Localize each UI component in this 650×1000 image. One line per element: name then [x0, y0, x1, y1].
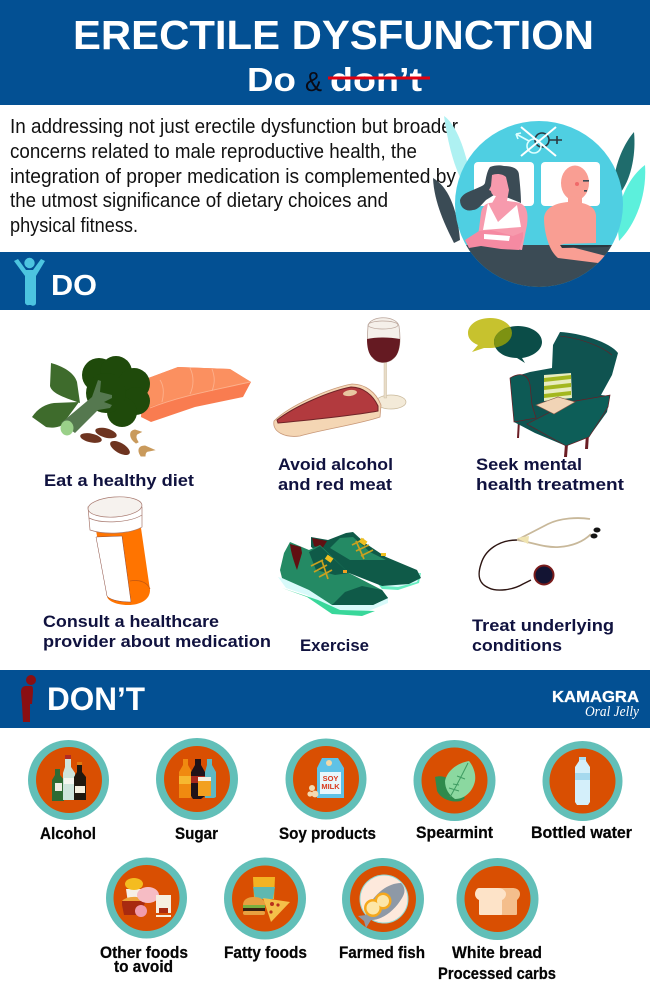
label: provider about medication	[43, 633, 271, 651]
icon: bottles	[52, 755, 86, 801]
illustration: couple in bed	[433, 116, 645, 295]
intro text: In addressing not just erectile dysfunction but broader	[10, 115, 458, 138]
icon: do person	[14, 258, 45, 306]
front shoe	[278, 542, 388, 616]
don't item: alcohol	[28, 740, 109, 843]
salmon	[141, 367, 251, 422]
pill bottle	[87, 495, 150, 605]
label: health treatment	[476, 476, 625, 494]
don't item: soy products	[279, 738, 376, 843]
title: ERECTILE DYSFUNCTION	[73, 12, 594, 58]
woman	[460, 165, 528, 250]
wine glass	[367, 318, 406, 409]
icon: don't person	[21, 675, 36, 722]
stethoscope	[479, 518, 600, 590]
logo: Oral Jelly	[585, 704, 639, 720]
icon: mint leaves	[435, 761, 475, 802]
don't item: farmed fish	[339, 858, 425, 962]
don't item: white bread	[438, 858, 556, 983]
back shoe	[311, 532, 421, 590]
item: exercise	[278, 532, 421, 655]
don't item: spearmint	[414, 740, 496, 842]
do section bar	[0, 252, 650, 310]
icon: mixed foods	[122, 878, 171, 917]
label: Eat a healthy diet	[44, 472, 195, 490]
intro text: physical fitness.	[10, 214, 138, 237]
icon: soy milk carton	[307, 758, 344, 798]
subtitle: do and don't	[247, 61, 430, 98]
man	[544, 166, 612, 263]
item: avoid alcohol and red meat	[274, 318, 406, 494]
label: Other foods	[100, 943, 188, 962]
leaves and broccoli	[32, 356, 150, 436]
intro text: the utmost significance of dietary choices and	[10, 189, 388, 212]
don't item: other foods	[100, 858, 188, 976]
label: Exercise	[300, 637, 369, 655]
item: consult about medication	[43, 495, 271, 651]
label: Bottled water	[531, 823, 632, 842]
nuts	[79, 426, 154, 458]
subtitle: do and don't: &	[305, 66, 322, 97]
label	[43, 613, 271, 651]
sneakers	[278, 532, 421, 616]
intro text: integration of proper medication is complemented by	[10, 165, 457, 188]
item: treat underlying conditions	[472, 518, 614, 655]
icon: soy milk carton: MILK	[321, 782, 340, 791]
logo: KAMAGRA	[552, 689, 639, 706]
icon: soda bottles	[179, 759, 216, 799]
logo	[552, 689, 639, 720]
don't section bar	[0, 670, 650, 728]
icon: bread loaf	[475, 888, 520, 915]
label: Soy products	[279, 824, 376, 843]
intro text	[10, 115, 458, 237]
do heading: DO	[51, 270, 97, 302]
item: healthy diet	[32, 356, 251, 490]
label: Fatty foods	[224, 943, 307, 962]
don't item: bottled water	[531, 741, 632, 842]
label	[278, 456, 393, 494]
label: White bread	[452, 943, 542, 962]
label: Spearmint	[416, 823, 493, 842]
label: and red meat	[278, 476, 393, 494]
label: Avoid alcohol	[278, 456, 393, 474]
label	[438, 943, 556, 983]
crossed gender symbols	[516, 127, 562, 156]
label: Processed carbs	[438, 964, 556, 983]
label: Seek mental	[476, 456, 582, 474]
item: seek mental health treatment	[468, 318, 625, 494]
speech bubbles	[468, 318, 542, 363]
steak	[274, 384, 381, 436]
label: Treat underlying	[472, 617, 614, 635]
don't heading: DON’T	[47, 681, 145, 717]
icon: burger, fries and pizza	[243, 877, 290, 922]
icon: soy milk carton: SOY	[323, 774, 338, 783]
label: conditions	[472, 637, 562, 655]
subtitle: do and don't: don’t	[330, 61, 422, 98]
armchair	[510, 332, 618, 457]
label: Sugar	[175, 824, 218, 843]
don't item: fatty foods	[224, 858, 307, 962]
intro text: concerns related to male reproductive health, the	[10, 140, 417, 163]
leaves	[433, 116, 645, 243]
label: to avoid	[114, 957, 173, 976]
label: Alcohol	[40, 824, 96, 843]
laces	[311, 539, 373, 579]
don't item: sugar	[156, 738, 238, 843]
label	[100, 943, 188, 976]
icon: water bottle	[575, 757, 590, 805]
label	[472, 617, 614, 655]
label: Consult a healthcare	[43, 613, 219, 631]
subtitle: do and don't: Do	[247, 61, 296, 98]
icon: fish on plate	[358, 875, 408, 928]
header banner	[0, 0, 650, 105]
label: Farmed fish	[339, 943, 425, 962]
label	[476, 456, 625, 494]
